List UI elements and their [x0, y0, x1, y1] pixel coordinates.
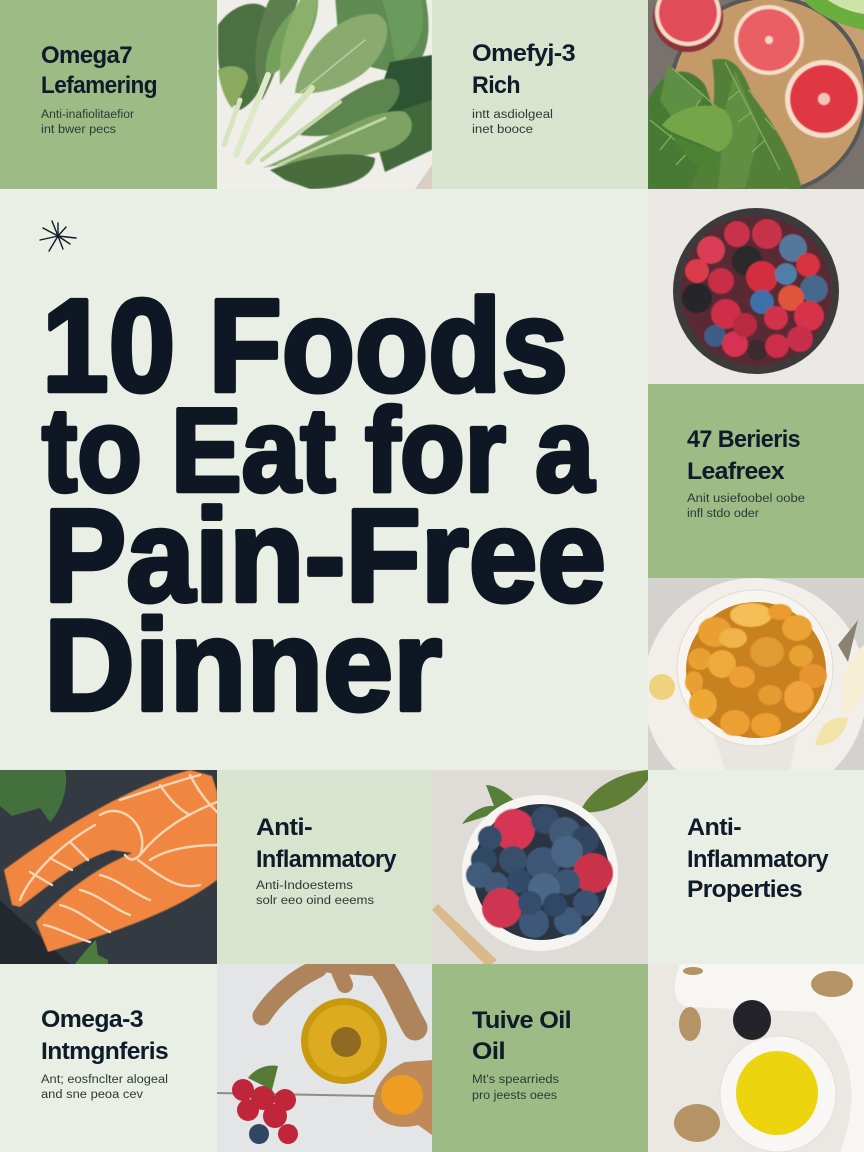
heading: Anti- Inflammatory Properties: [687, 814, 829, 903]
grapefruit slices: [653, 0, 863, 138]
ginger and turmeric: [373, 1060, 432, 1135]
description text: pro jeests oees: [472, 1090, 557, 1102]
image: white bowl of golden chunks: [648, 578, 864, 770]
description text: and sne peoa cev: [41, 1089, 143, 1101]
image: bowl of blueberries and raspberries: [432, 770, 648, 964]
heading: Anti- Inflammatory Properties: Properties: [687, 876, 802, 903]
heading: Omefyj-3 Rich: Omefyj-3: [472, 40, 575, 67]
title: 10 Foods to Eat for a Pain-Free Dinner: [42, 272, 606, 738]
description text: Anti-Indoestems: [256, 880, 353, 892]
oil dish: [301, 998, 387, 1084]
blackberry: [733, 1000, 771, 1040]
image: ginger, oil and red berries: [217, 962, 432, 1152]
image: bowl of mixed berries: [673, 208, 839, 374]
image: olive oil bowl with walnuts: [674, 964, 864, 1152]
walnuts: [674, 967, 853, 1142]
icon: starburst: [40, 221, 76, 251]
heading: 47 Berieris Leafreex: [687, 426, 800, 485]
description text: [41, 109, 134, 136]
description text: infl stdo oder: [687, 508, 759, 520]
heading: 47 Berieris Leafreex: Leafreex: [687, 458, 785, 485]
heading: 47 Berieris Leafreex: 47 Berieris: [687, 426, 800, 453]
description text: [472, 1074, 559, 1102]
panel: Anti-Inflammatory: [217, 770, 432, 964]
description text: [256, 880, 374, 907]
description text: Ant; eosfnclter alogeal: [41, 1074, 168, 1086]
heading: Omefyj-3 Rich: [472, 40, 575, 99]
panel: main title background: [0, 189, 648, 770]
description text: solr eeo oind eeems: [256, 895, 374, 907]
oil bowl: [720, 1036, 836, 1152]
description text: intt asdiolgeal: [472, 109, 553, 121]
image: grapefruit and herbs on board: [648, 0, 864, 193]
heading: Omega-3 Intmgnferis: [41, 1006, 168, 1065]
heading: Omega7 Lefamering: [41, 42, 157, 99]
description text: int bwer pecs: [41, 124, 116, 136]
panel: Omefyj-3 Rich: [432, 0, 648, 189]
heading: Tuive Oil: [472, 1007, 571, 1065]
description text: Anit usiefoobel oobe: [687, 493, 805, 505]
panel: Tuive Oil: [432, 964, 648, 1152]
heading: Omega-3 Intmgnferis: Intmgnferis: [41, 1038, 168, 1065]
ginger root: [262, 962, 415, 1028]
description text: [687, 493, 805, 520]
image: salmon fillets: [0, 770, 217, 964]
description text: [41, 1074, 168, 1101]
title: 10 Foods to Eat for a Pain-Free Dinner: 10 Foods: [42, 272, 568, 419]
heading: Anti- Inflammatory: Inflammatory: [256, 846, 397, 873]
panel: 47 Berieris Leafreex: [648, 384, 864, 578]
heading: Anti- Inflammatory: [256, 814, 397, 873]
heading: Omega7 Lefamering: Lefamering: [41, 72, 157, 99]
title: 10 Foods to Eat for a Pain-Free Dinner: Pain-Free: [44, 482, 606, 629]
panel: Anti-Inflammatory Properties: [648, 770, 864, 964]
description text: [472, 109, 553, 136]
description text: inet booce: [472, 124, 533, 136]
heading: Anti- Inflammatory Properties: Anti-: [687, 814, 742, 841]
red berries: [232, 1066, 298, 1144]
description text: Anti-inafiolitaefior: [41, 109, 134, 121]
heading: Omega-3 Intmgnferis: Omega-3: [41, 1006, 143, 1033]
title: 10 Foods to Eat for a Pain-Free Dinner: Dinner: [44, 592, 442, 738]
blueberry: [249, 1124, 269, 1144]
description text: Mt's spearrieds: [472, 1074, 559, 1086]
heading: Tuive Oil: Tuive Oil: [472, 1007, 571, 1034]
heading: Tuive Oil: Oil: [472, 1038, 505, 1065]
title: 10 Foods to Eat for a Pain-Free Dinner: to Eat for a: [42, 384, 595, 517]
panel: Omega-3 Intmgnferis: [0, 964, 217, 1152]
heading: Omefyj-3 Rich: Rich: [472, 72, 520, 99]
heading: Anti- Inflammatory: Anti-: [256, 814, 313, 841]
panel: Omega7 Lefamering: [0, 0, 217, 189]
heading: Anti- Inflammatory Properties: Inflammatory: [687, 846, 829, 873]
image: spinach leaves in bowl: [217, 0, 432, 189]
heading: Omega7 Lefamering: Omega7: [41, 42, 132, 69]
